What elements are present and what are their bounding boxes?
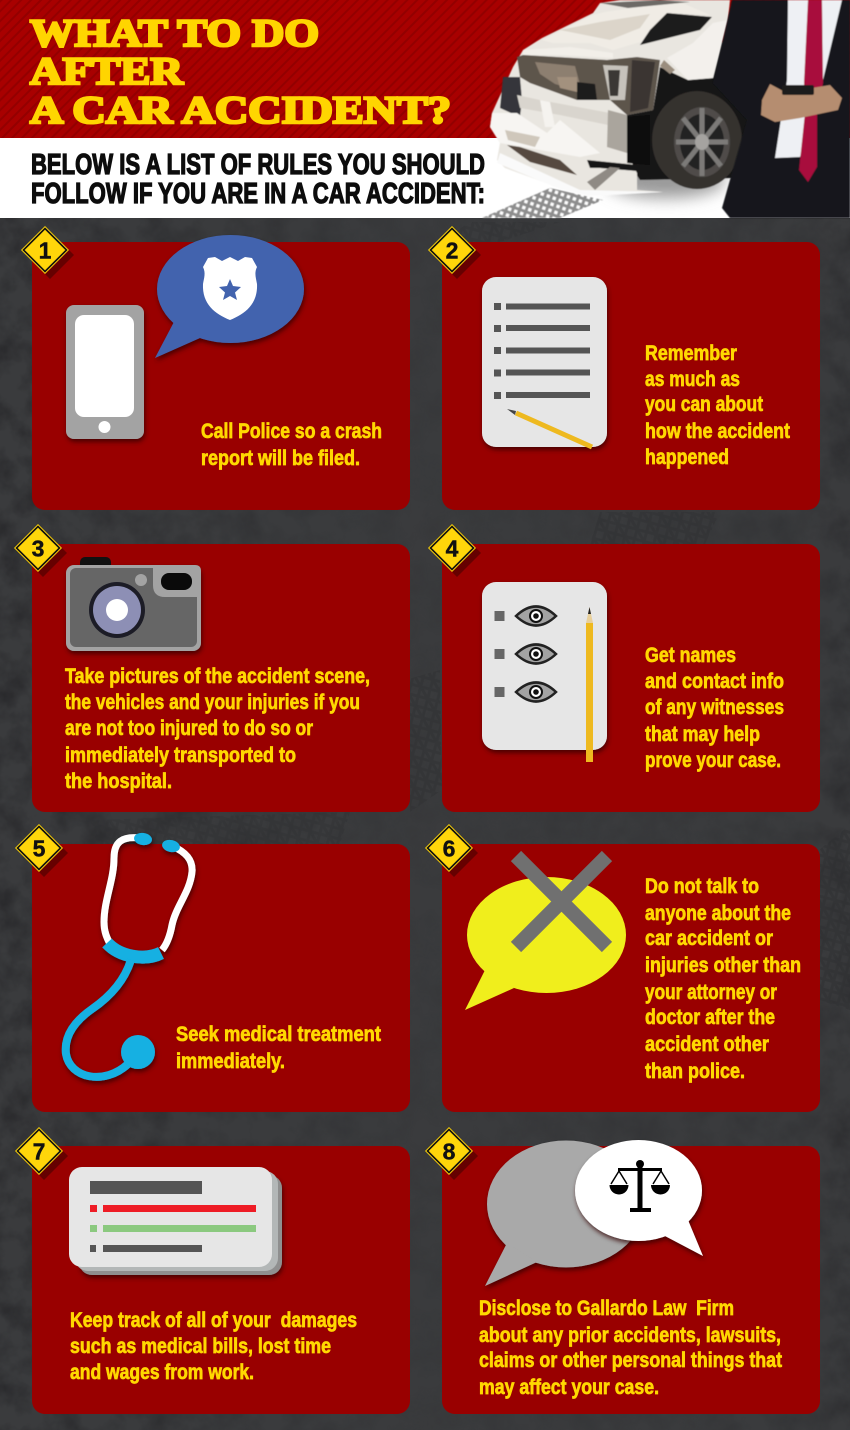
badge: number 1: [21, 226, 74, 279]
panel: step 3: [32, 544, 410, 812]
text: step 2: as much as: [645, 368, 740, 391]
text: step 1: report will be filed.: [201, 447, 360, 470]
text: step 3: Take pictures of the accident scene,: [65, 665, 370, 688]
badge: number 3: [14, 524, 67, 577]
icon: smartphone: [66, 305, 144, 439]
panel: step 2: [442, 242, 820, 510]
text: step 6: doctor after the: [645, 1006, 775, 1029]
badge: number 5: 5: [33, 836, 46, 862]
headlight cavity: [500, 77, 522, 117]
text: step 5: Seek medical treatment: [176, 1023, 381, 1046]
text: step 6: Do not talk to: [645, 875, 759, 898]
icon: document with pencil: [482, 277, 607, 447]
text: step 4: and contact info: [645, 670, 784, 693]
icon: camera: [66, 557, 201, 651]
panel: step 4: [442, 544, 820, 812]
icon: stethoscope: [66, 832, 192, 1077]
text: step 1: Call Police so a crash: [201, 420, 382, 443]
text: step 2: [645, 342, 790, 469]
centre metal panel: [607, 110, 627, 153]
text: step 6: car accident or: [645, 927, 773, 950]
photo: man in suit with phone: [713, 0, 850, 218]
text: step 6: accident other: [645, 1033, 769, 1056]
text: step 7: [70, 1309, 357, 1384]
text: step 8: claims or other personal things that: [479, 1349, 782, 1372]
floor shadow: [605, 162, 725, 198]
photo: wrecked car: [482, 0, 750, 218]
panel: step 6: [442, 844, 820, 1112]
text: step 7: such as medical bills, lost time: [70, 1335, 331, 1358]
badge: number 5: [15, 824, 68, 877]
text: step 1: [201, 420, 382, 470]
badge: number 1: 1: [39, 238, 52, 264]
text: step 5: immediately.: [176, 1050, 285, 1073]
text: step 4: Get names: [645, 644, 736, 667]
hood: [542, 2, 710, 50]
text: step 8: [479, 1297, 782, 1399]
text: step 8: Disclose to Gallardo Law Firm: [479, 1297, 734, 1320]
text: step 2: how the accident: [645, 420, 790, 443]
subtitle: [31, 149, 485, 210]
text: step 6: than police.: [645, 1060, 745, 1083]
header: [0, 0, 850, 218]
upper bumper strip: [517, 95, 610, 125]
badge: number 2: [428, 226, 481, 279]
grille: [507, 145, 577, 175]
text: step 3: are not too injured to do so or: [65, 717, 313, 740]
panel: step 1: [32, 235, 410, 510]
icon: stack of records: [69, 1167, 282, 1275]
subtitle: FOLLOW IF YOU ARE IN A CAR ACCIDENT:: [31, 178, 485, 210]
title: AFTER: [30, 50, 184, 93]
engine bay: [517, 55, 660, 115]
badge: number 4: 4: [446, 536, 459, 562]
lower bumper: [490, 113, 600, 157]
text: step 3: the vehicles and your injuries if you: [65, 691, 360, 714]
dark wheel well: [627, 40, 750, 180]
title: WHAT TO DO: [30, 12, 319, 55]
text: step 4: that may help: [645, 723, 760, 746]
badge: number 3: 3: [32, 536, 44, 562]
badge: number 6: 6: [443, 836, 455, 862]
title: A CAR ACCIDENT?: [30, 89, 451, 132]
text: step 2: you can about: [645, 393, 763, 416]
text: step 8: about any prior accidents, lawsuits,: [479, 1324, 781, 1347]
text: step 4: of any witnesses: [645, 696, 784, 719]
text: step 3: the hospital.: [65, 770, 172, 793]
panel: step 8: [442, 1140, 820, 1414]
badge: number 7: [15, 1127, 68, 1180]
icon: crossed-out speech bubble: [465, 856, 626, 1010]
text: step 7: Keep track of all of your damages: [70, 1309, 357, 1332]
wheel: [652, 91, 742, 189]
text: step 5: [176, 1023, 381, 1073]
icon: gray speech bubble: [485, 1140, 645, 1286]
fender: [667, 20, 728, 80]
icon: witness checklist: [482, 582, 607, 762]
badge: number 8: 8: [443, 1138, 456, 1164]
badge: number 7: 7: [33, 1138, 45, 1164]
text: step 7: and wages from work.: [70, 1361, 254, 1384]
text: step 6: your attorney or: [645, 981, 777, 1004]
text: step 4: prove your case.: [645, 749, 781, 772]
text: step 6: [645, 875, 801, 1083]
badge: number 2: 2: [446, 238, 458, 264]
panel: step 7: [32, 1146, 410, 1414]
title: [30, 12, 451, 132]
icon: police speech bubble: [155, 235, 304, 358]
panel: step 5: [32, 832, 410, 1112]
subtitle: BELOW IS A LIST OF RULES YOU SHOULD: [31, 149, 485, 181]
text: step 6: anyone about the: [645, 902, 791, 925]
text: step 2: happened: [645, 446, 729, 469]
text: step 3: [65, 665, 370, 793]
text: step 3: immediately transported to: [65, 744, 296, 767]
text: step 4: [645, 644, 784, 772]
badge: number 4: [428, 524, 481, 577]
white subtitle band: [0, 138, 850, 218]
text: step 8: may affect your case.: [479, 1376, 659, 1399]
text: step 2: Remember: [645, 342, 737, 365]
badge: number 6: [425, 824, 478, 877]
lower lip: [497, 153, 663, 196]
car body: [490, 0, 730, 195]
text: step 6: injuries other than: [645, 954, 801, 977]
badge: number 8: [425, 1127, 478, 1180]
icon: white speech bubble with scales: [575, 1140, 703, 1256]
red title banner: [0, 0, 850, 138]
